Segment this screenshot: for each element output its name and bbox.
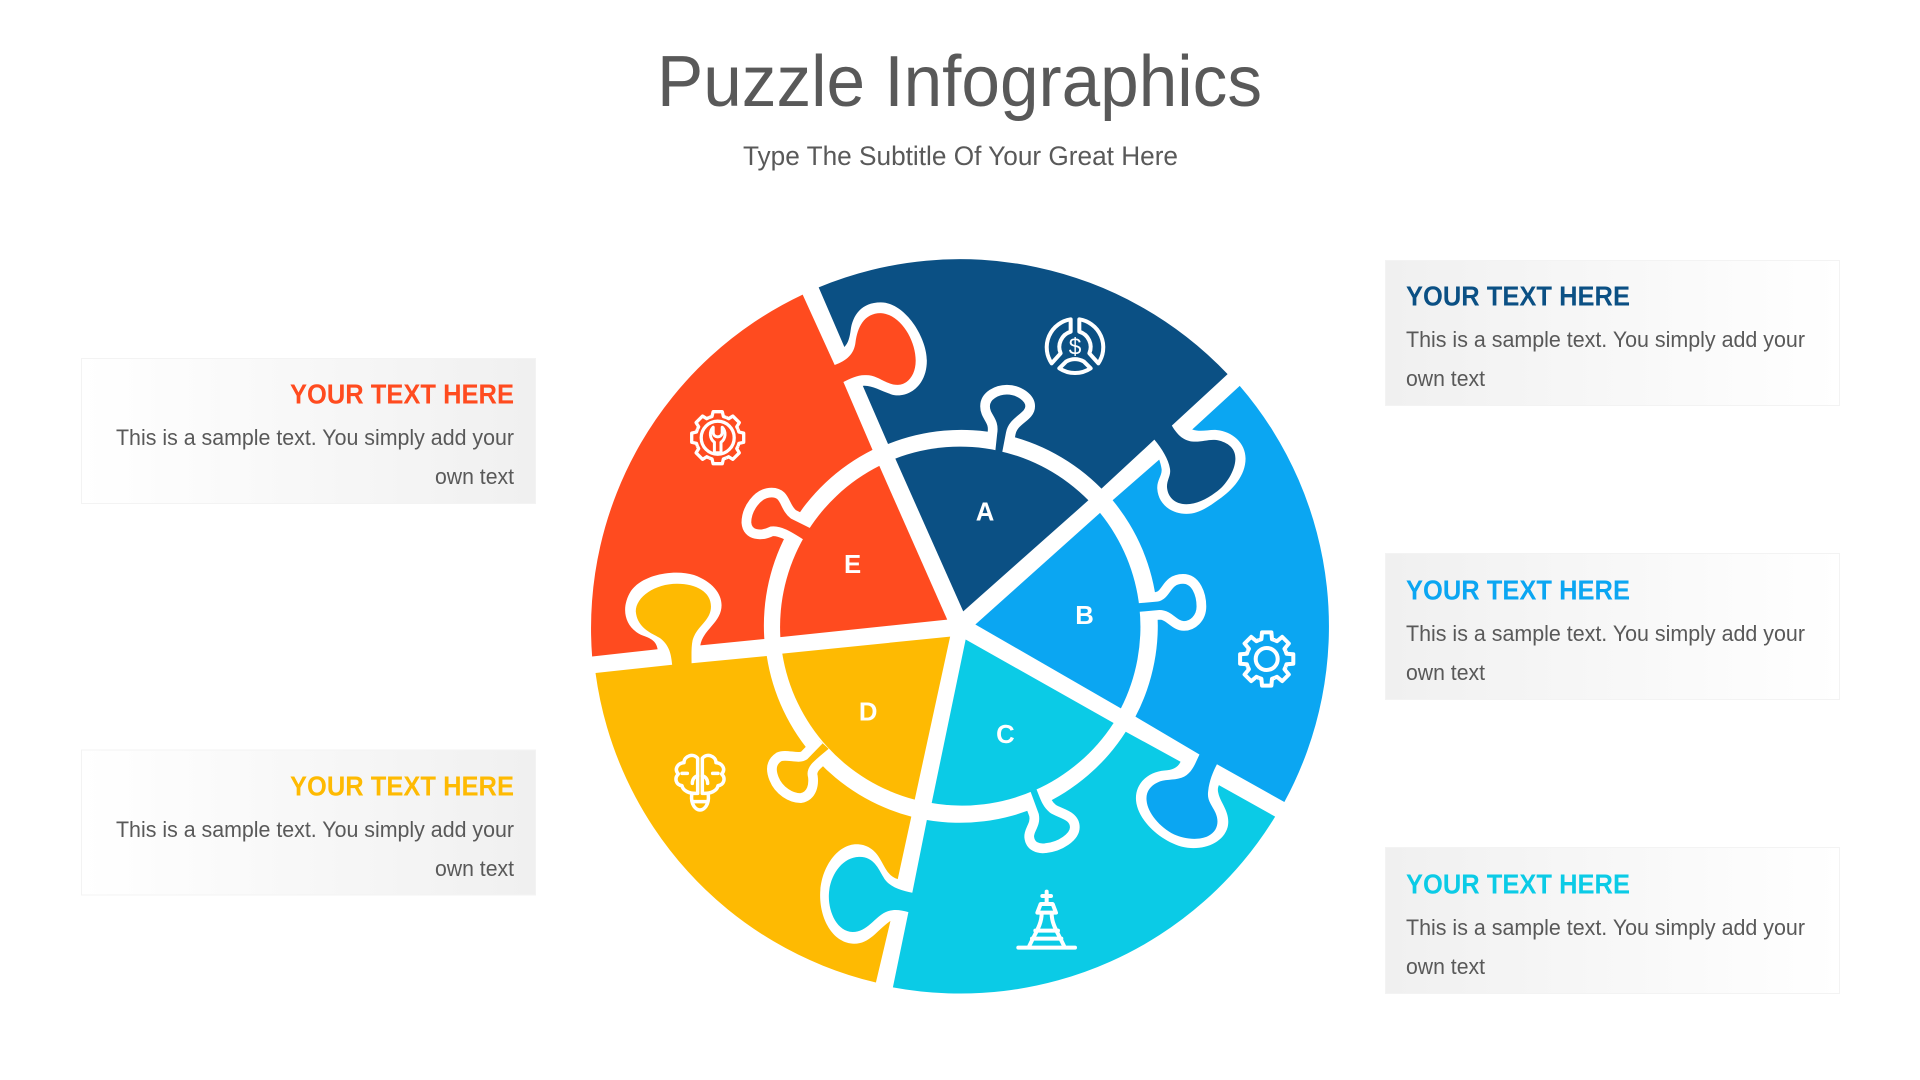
body: C: This is a sample text. You simply add your [1406,915,1805,940]
inner tab: D [772,740,832,798]
body: C [1406,915,1805,979]
body: D [116,817,514,881]
panel: D text, bottom left [82,750,536,895]
panel: B text, middle right [1386,554,1840,700]
inner tab: B [1133,579,1201,626]
letter B: B [1075,602,1094,630]
body: A [1406,327,1805,391]
body: E: This is a sample text. You simply add your [116,425,514,450]
panel: C text, bottom right [1386,848,1840,994]
letter A: A [976,499,994,527]
heading: E: YOUR TEXT HERE [290,378,514,410]
body: B: own text [1406,660,1485,685]
panel: A text, top right [1386,260,1840,406]
puzzle circle [591,259,1329,994]
body: C: own text [1406,954,1485,979]
inner piece: A [895,447,1088,611]
body: E [116,425,514,489]
body: A: own text [1406,366,1485,391]
icon: brain bulb [676,755,724,810]
inner piece: E [780,466,947,637]
icon: chess king [1018,892,1075,948]
panel: E text, top left [82,358,536,504]
icon: dollar segments: $ [1069,334,1082,360]
body: B [1406,621,1805,685]
title: Puzzle Infographics [657,42,1262,122]
icon: dollar segments [1047,319,1103,373]
body: A: This is a sample text. You simply add your [1406,327,1805,352]
inner piece: D [782,637,950,800]
inner piece: C [932,640,1114,806]
inner tab: A [985,390,1030,456]
inner tab: C [1022,781,1075,848]
subtitle: Type The Subtitle Of Your Great Here [743,141,1178,171]
heading: B: YOUR TEXT HERE [1406,574,1630,606]
inner piece: B [975,513,1140,708]
heading: C: YOUR TEXT HERE [1406,868,1630,900]
icon: gear [1240,632,1293,686]
letter D: D [859,699,877,727]
outer piece: C cyan [829,732,1275,994]
outer piece: E orange [591,295,916,657]
icon: gear with wrench [692,412,744,464]
body: D: This is a sample text. You simply add your [116,817,514,842]
body: D: own text [435,856,514,881]
heading: D: YOUR TEXT HERE [290,770,514,802]
body: B: This is a sample text. You simply add your [1406,621,1805,646]
outer piece: A navy [819,259,1235,504]
body: E: own text [435,464,514,489]
letter E: E [844,551,861,579]
heading: A: YOUR TEXT HERE [1406,280,1630,312]
letter C: C [996,721,1015,749]
outer piece: D amber [596,584,911,983]
inner tab: E [746,493,813,548]
outer piece: B blue [1113,386,1329,839]
